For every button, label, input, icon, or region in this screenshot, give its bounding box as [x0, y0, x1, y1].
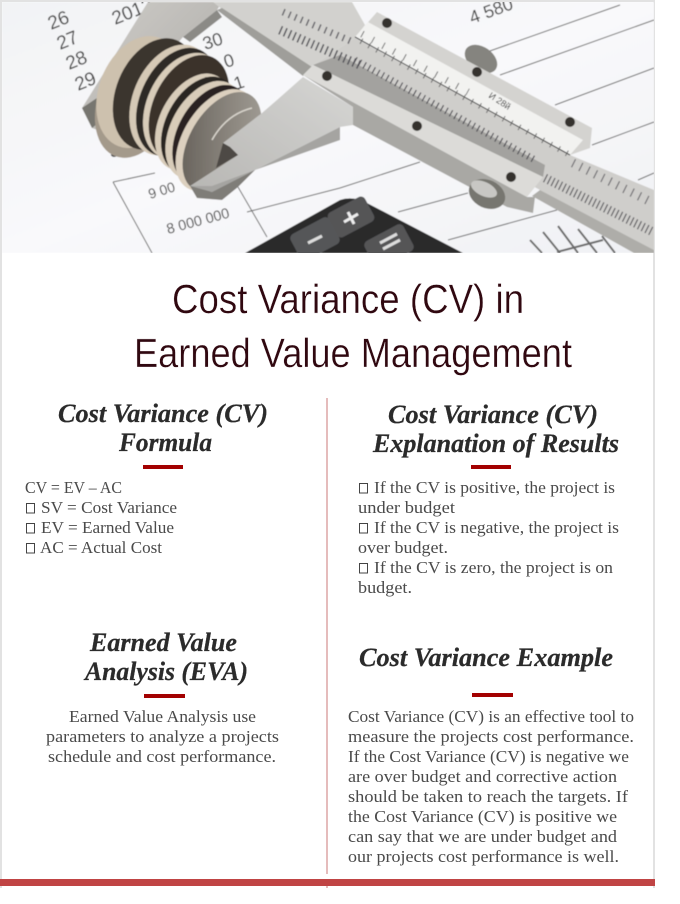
sheet numbers: [45, 0, 516, 238]
example description: If the Cost Variance (CV) is negative we: [348, 747, 629, 766]
panel: earned value analysis: [46, 628, 279, 766]
sheet numbers: 27: [54, 27, 81, 55]
panel: explanation of results: [358, 400, 619, 597]
heading: explanation: [372, 400, 619, 458]
heading: explanation: Explanation of Results: [372, 429, 619, 458]
sheet numbers: 30: [200, 29, 225, 54]
photo: caliper measuring a stack of coins on a financial sheet: И 28й: [487, 90, 512, 112]
example description: [348, 707, 634, 866]
title: Cost Variance (CV) in: [172, 276, 524, 322]
footer bar: [0, 879, 655, 886]
panel: cost variance example: [348, 643, 634, 866]
sheet numbers: 8 000 000: [165, 206, 231, 238]
example description: our projects cost performance is well.: [348, 847, 619, 866]
coin stack: [94, 36, 262, 190]
example description: Cost Variance (CV) is an effective tool to: [348, 707, 634, 726]
heading: explanation: Cost Variance (CV): [388, 400, 598, 429]
sheet numbers: 29: [72, 68, 99, 96]
sheet numbers: 1: [231, 72, 247, 94]
accent rule: [472, 693, 513, 697]
results list: If the CV is positive, the project is: [374, 478, 615, 497]
formula list: EV = Earned Value: [41, 518, 174, 537]
example description: the Cost Variance (CV) is positive we: [348, 807, 617, 826]
lower thumb wheel: [468, 178, 506, 210]
beam tick marks: [280, 12, 653, 232]
panel: cost variance formula: [25, 399, 268, 557]
formula list: [25, 478, 177, 557]
example description: can say that we are under budget and: [348, 827, 618, 846]
lower slider: [303, 65, 543, 197]
fixed jaw: [82, 2, 222, 140]
accent rule: [143, 465, 183, 469]
sheet numbers: 9 00: [146, 179, 177, 202]
sheet lines: [113, 5, 654, 253]
title: [134, 276, 573, 376]
accent rule: [144, 694, 185, 698]
EVA description: parameters to analyze a projects: [46, 727, 279, 746]
caliper screws: [322, 18, 575, 182]
photo: caliper measuring a stack of coins on a financial sheet: [2, 0, 654, 270]
heading: example: Cost Variance Example: [359, 643, 613, 672]
moving jaw: [190, 77, 353, 200]
results list: If the CV is zero, the project is on: [374, 558, 614, 577]
results list: under budget: [358, 498, 455, 517]
heading: EVA: Analysis (EVA): [83, 657, 248, 686]
column divider: [326, 398, 328, 888]
accent rule: [471, 465, 511, 469]
results list: If the CV is negative, the project is: [374, 518, 619, 537]
EVA description: [46, 707, 279, 766]
heading: EVA: [83, 628, 248, 686]
formula list: CV = EV – AC: [25, 478, 122, 497]
formula list: SV = Cost Variance: [41, 498, 177, 517]
sheet numbers: 26: [45, 7, 72, 35]
scale beam plate: [214, 2, 365, 67]
example description: are over budget and corrective action: [348, 767, 618, 786]
top thumb wheel: [464, 44, 498, 74]
sheet numbers: 28: [63, 47, 90, 75]
results list: over budget.: [358, 538, 448, 557]
results list: budget.: [358, 578, 412, 597]
heading: formula: [58, 399, 268, 457]
example description: measure the projects cost performance.: [348, 727, 634, 746]
heading: formula: Cost Variance (CV): [58, 399, 268, 428]
sheet numbers: 3: [106, 140, 122, 162]
upper slider: [355, 12, 592, 155]
EVA description: Earned Value Analysis use: [69, 707, 256, 726]
example description: should be taken to reach the targets. If: [348, 787, 628, 806]
EVA description: schedule and cost performance.: [48, 747, 276, 766]
sheet numbers: 0: [221, 50, 237, 72]
formula list: AC = Actual Cost: [40, 538, 162, 557]
heading: EVA: Earned Value: [89, 628, 237, 657]
title: Earned Value Management: [134, 330, 573, 376]
heading: formula: Formula: [118, 428, 212, 457]
results list: [358, 478, 619, 597]
calculator: [245, 196, 463, 253]
